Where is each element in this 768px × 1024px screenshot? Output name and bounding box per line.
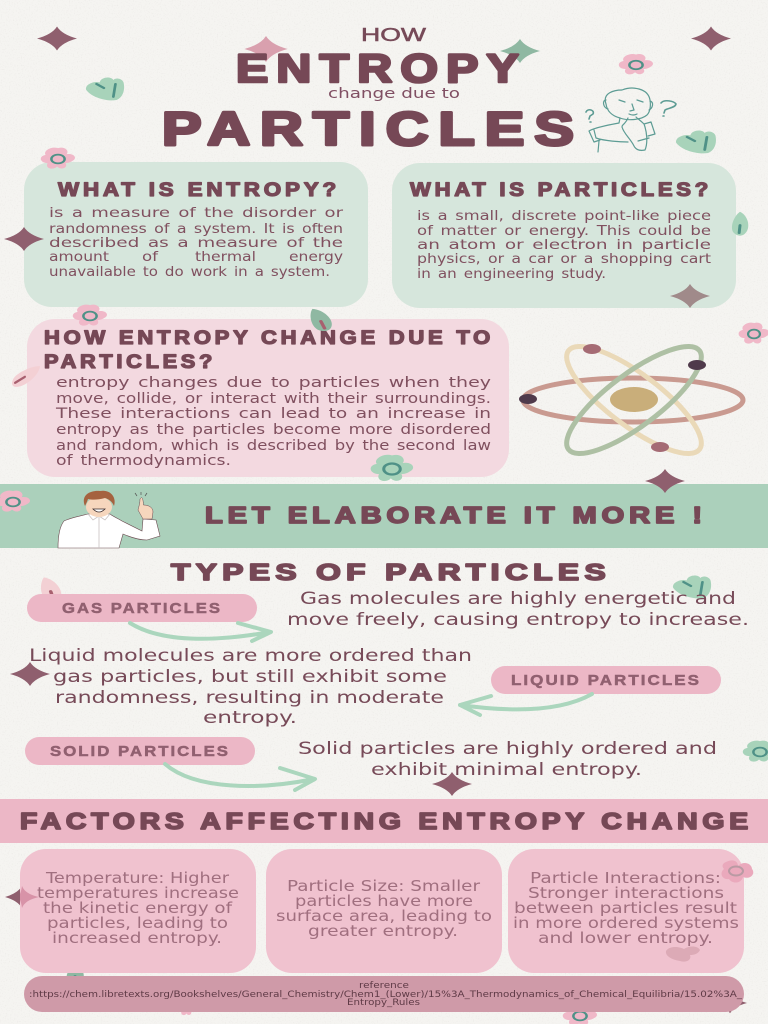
body text: and random, which is described by the second law (56, 438, 491, 454)
panel: particle interactions: and lower entropy. (538, 929, 713, 947)
heading: types of particles: TYPES OF PARTICLES (171, 559, 611, 585)
title: HOW (361, 25, 426, 45)
panel: what is entropy (24, 162, 368, 307)
body text: in an engineering study. (417, 266, 606, 282)
heading: HOW ENTROPY CHANGE DUE TO (44, 328, 494, 349)
heading: PARTICLES? (44, 352, 216, 373)
body text: amount (49, 249, 109, 265)
panel: what is particles (392, 163, 736, 308)
panel: particle size: particles have more (295, 892, 473, 910)
text: solid description: exhibit minimal entropy. (371, 760, 642, 780)
panel: particle interactions (508, 849, 753, 973)
body text: is a small, discrete point-like piece (417, 208, 711, 224)
reference bar: reference (359, 981, 410, 991)
pill: gas particles (27, 594, 257, 622)
text: liquid description: randomness, resulting in moderate (55, 688, 444, 708)
heading (44, 328, 494, 373)
body text: entropy changes due to particles when they (56, 375, 492, 391)
title: ENTROPY (236, 47, 527, 91)
heading: WHAT IS PARTICLES? (410, 180, 712, 201)
body text: entropy as the particles become more disordered (56, 422, 491, 438)
arrow: solid particles (165, 764, 315, 790)
body text: of matter or energy. This could be (417, 223, 711, 239)
body text: unavailable to do work in a system. (49, 264, 330, 280)
pill: solid particles: SOLID PARTICLES (50, 743, 230, 760)
decorative elements behind factor cards (5, 886, 747, 1024)
text: gas description: Gas molecules are highly energetic and (300, 589, 736, 609)
panel: particle interactions: in more ordered systems (513, 914, 739, 932)
banner: factors affecting entropy change (0, 799, 768, 843)
arrow: gas particles (130, 623, 271, 641)
panel: particle size: surface area, leading to (276, 907, 492, 925)
panel: particle size: Particle Size: Smaller (287, 877, 481, 895)
decorative leaves and stars: types section (10, 575, 768, 796)
decorative stars: top (37, 26, 731, 63)
text: gas description (287, 589, 749, 630)
reference bar: Entropy_Rules (347, 998, 420, 1008)
decorative stars, flower and leaf: upper panels (4, 148, 748, 308)
body text: an atom or electron in particle (417, 237, 711, 253)
banner: let elaborate it more (0, 484, 768, 548)
text: solid description: Solid particles are highly ordered and (298, 739, 717, 759)
body text: is a measure of the disorder or (49, 205, 344, 221)
chart: atom diagram (519, 330, 743, 470)
title (162, 25, 584, 155)
body text (49, 205, 344, 280)
panel: particle interactions: Stronger interactions (528, 884, 724, 902)
body text: move, collide, or interact with their surroundings. (56, 391, 491, 407)
text: liquid description: Liquid molecules are more ordered than (29, 646, 472, 666)
text: liquid description: entropy. (203, 708, 297, 728)
illustration: thinking person (586, 88, 676, 152)
body text (55, 375, 492, 469)
panel: how entropy change due to particles (27, 319, 509, 477)
panel: temperature: temperatures increase (37, 884, 239, 902)
panel: particle size (266, 849, 502, 973)
body text: described as a measure of the (49, 235, 343, 251)
text: liquid description (29, 646, 472, 728)
decorative flowers and leaves: panel edges (9, 305, 768, 481)
body text: randomness of a system. It is often (49, 221, 343, 237)
body text: physics, or a car or a shopping cart (417, 251, 711, 267)
panel: temperature (20, 849, 256, 973)
heading: WHAT IS ENTROPY? (58, 180, 340, 201)
banner: factors affecting entropy change: FACTORS AFFECTING ENTROPY CHANGE (20, 808, 753, 834)
decorative flowers and leaves: top (86, 54, 716, 153)
decorative star and flower: banner (0, 469, 685, 512)
pill: liquid particles (491, 666, 721, 694)
banner: let elaborate it more: LET ELABORATE IT MORE ! (205, 502, 707, 528)
text: gas description: move freely, causing entropy to increase. (287, 610, 749, 630)
pill: gas particles: GAS PARTICLES (62, 600, 222, 617)
reference bar (24, 976, 744, 1012)
text: solid description (298, 739, 717, 780)
title: PARTICLES (162, 102, 584, 155)
body text: thermal (195, 249, 256, 265)
body text: of thermodynamics. (56, 453, 231, 469)
panel: temperature: particles, leading to (47, 914, 228, 932)
panel: particle size: greater entropy. (308, 922, 458, 940)
panel: particle interactions: Particle Interactions: (530, 869, 721, 887)
illustration: man pointing up (58, 491, 160, 548)
body text: of (142, 249, 160, 265)
body text (417, 208, 711, 282)
panel: particle interactions: between particles result (514, 899, 737, 917)
panel: temperature: increased entropy. (52, 929, 222, 947)
body text: These interactions can lead to an increase in (55, 406, 491, 422)
arrow: liquid particles (460, 694, 592, 715)
panel: temperature: Temperature: Higher (45, 869, 230, 887)
text: liquid description: gas particles, but still exhibit some (53, 667, 447, 687)
pill: liquid particles: LIQUID PARTICLES (511, 672, 701, 689)
panel: temperature: the kinetic energy of (43, 899, 233, 917)
pill: solid particles (25, 737, 255, 765)
body text: energy (289, 249, 343, 265)
title: change due to (328, 86, 460, 102)
reference bar: :https://chem.libretexts.org/Bookshelves/General_Chemistry/Chem1_(Lower)/15%3A_Thermodynamics_of_Chemical_Equilibria/15.02%3A_ (29, 990, 743, 1000)
